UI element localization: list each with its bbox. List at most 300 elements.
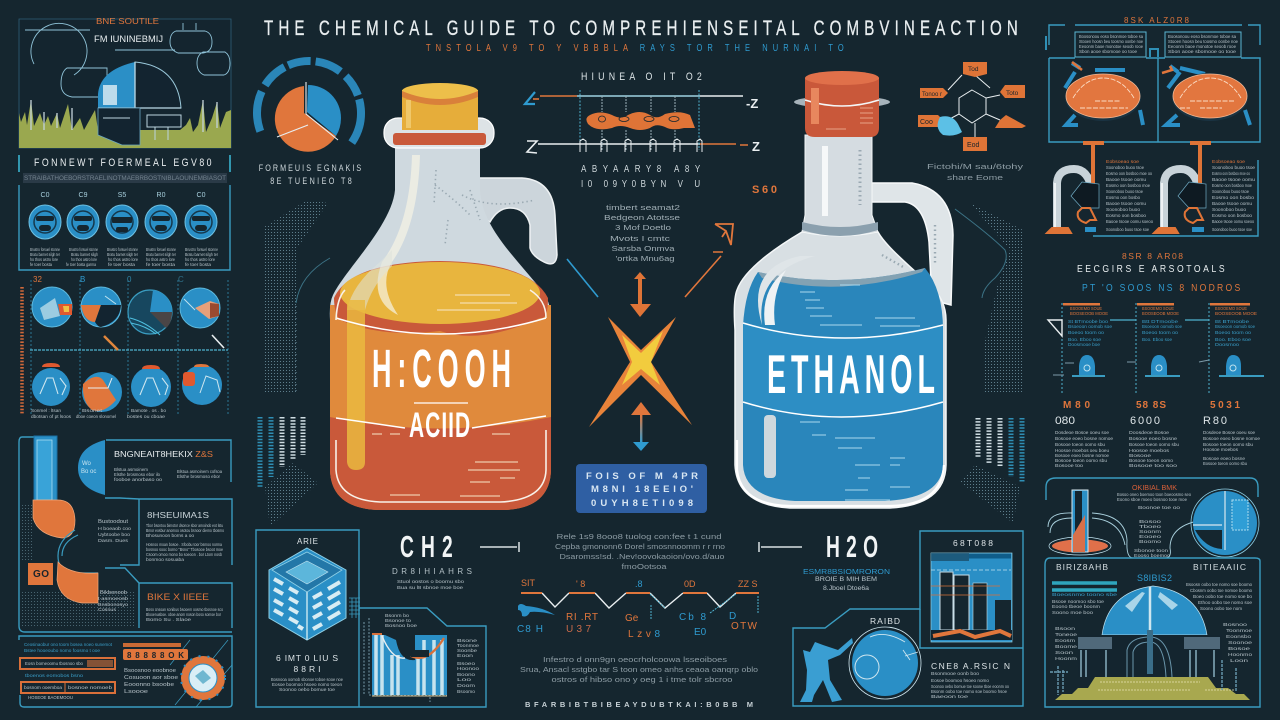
arch lines (1048, 513, 1133, 558)
tag: right lower (995, 115, 1026, 128)
step 1 text: St BTmoobe boo (1068, 319, 1109, 324)
tag: left lower: Coo (920, 119, 933, 126)
brush mark (518, 604, 555, 616)
note text 1: Blstua asmoinem cofsoa (177, 469, 222, 474)
faucet text 1: Soonoboo buoo tsoe (1106, 165, 1144, 170)
note text 1: fooboe anorbaso oo (114, 477, 163, 482)
arrow head (525, 92, 535, 104)
circle icon 4 (145, 205, 177, 239)
body liquid (330, 305, 551, 510)
pipe: upper elbow (33, 500, 75, 538)
faucet text 2: Eosmo oon bosbo (1212, 195, 1255, 200)
step notes 3 (1203, 430, 1260, 466)
X star (589, 317, 692, 427)
icon captions: ho thos astro lore (71, 257, 97, 262)
timeline labels lower: Ge (625, 613, 639, 624)
brackets (580, 139, 702, 152)
legend text (124, 668, 178, 695)
highlight strip (764, 415, 776, 478)
left text: Soon (1055, 650, 1074, 655)
step notes 1 (1055, 430, 1113, 468)
step 1 text: Bsoeoon oomob soe (1068, 324, 1112, 329)
lower rail (538, 143, 700, 145)
step values orange (1063, 400, 1240, 411)
right text: Toonmoe (1226, 628, 1253, 633)
pointer: H2O (759, 542, 802, 552)
chart side note: Loo (457, 677, 472, 682)
right text: Soonoe (1228, 640, 1253, 645)
CH2 label: DR8IHIAHRS (392, 567, 472, 576)
icon captions: ho thos astro lore (30, 257, 58, 262)
pie caption (259, 163, 362, 186)
side note 1 (98, 519, 132, 543)
legend text: Eooonno bsoobe (124, 682, 174, 688)
strip (23, 173, 227, 183)
note box 1: Stooen hoosn beu toosmo oonbe noe (1079, 39, 1143, 44)
timeline labels lower: OTW (731, 621, 758, 632)
faucet text 1: Eobsoeao soe (1106, 159, 1139, 164)
blueprint outlines (25, 23, 230, 97)
step notes 2 (1129, 430, 1179, 468)
left text: Hoonm (1055, 656, 1077, 661)
dome (1102, 586, 1207, 635)
panel text (1117, 492, 1191, 558)
circle icon 1 (29, 205, 61, 239)
step 2 text: Bsoeoon oomob soe (1142, 324, 1182, 329)
neck dots (434, 170, 535, 245)
caption text: Bsonmooe oonb boo (931, 671, 979, 676)
CH2 caption (397, 579, 465, 590)
legend row 4: bosnom ooemboa (24, 685, 62, 690)
legend row 2: Eosn bomeoomu tbosnoo sbo (25, 661, 83, 666)
chart side note: Eoon (457, 653, 474, 658)
orange sector (275, 86, 336, 152)
step notes 3: Bosooe toeon oomo sbu (1203, 461, 1247, 466)
side note 2: t asmoeosb (98, 596, 129, 601)
cap (805, 78, 879, 137)
chart side note: Boono (457, 672, 476, 677)
zigzag timeline (517, 578, 759, 640)
panel: legend strip (19, 636, 232, 707)
figure (800, 638, 853, 702)
step 2 text: BOOSEOOB MOOE (1142, 311, 1179, 316)
step values white: 080 (1055, 415, 1075, 427)
step notes 1: Bosooe toeon oomo sbu (1055, 442, 1105, 447)
diagram: chain molecule (525, 71, 760, 189)
cube caption: Eosoe boomoo hsoeo nomo toeon (272, 682, 342, 687)
icon captions: Brustro forsuel stonne (146, 247, 176, 252)
cube caption: Bosnooa oomob sbonoe toboe sooe noe (271, 677, 343, 682)
tag: left: Tonoo r (922, 92, 942, 98)
panel text: Eooso boemoo (1134, 553, 1171, 558)
glass (330, 148, 551, 320)
footer paragraph: Infestro d onn9gn oeocrholcoowa lsseoiboes (543, 655, 727, 664)
sublabel: ACIID (409, 407, 470, 445)
step 1 text: Doosmooe boe (1068, 342, 1100, 347)
heading: EECGIRS E ARSOTOALS (1077, 263, 1225, 275)
icon captions: Bratu barnet silgh ter (107, 252, 138, 257)
panel: five circular icons (19, 185, 230, 270)
subheading: PT 'O SOOS NS 8 NODROS (1082, 282, 1240, 294)
grass and spires (19, 100, 231, 148)
Z labels: Z (752, 139, 760, 154)
tag: top: Tod (968, 66, 979, 73)
step values orange: M80 (1063, 400, 1090, 411)
chart side note (457, 638, 480, 694)
icon labels: C0 (41, 192, 50, 199)
left text: Bsooe noomoo sbo toe (1052, 599, 1104, 604)
left text: Eoosm (1055, 638, 1075, 643)
step 1 text: Boeoo toom oo (1068, 330, 1104, 335)
legend row 1 (24, 642, 113, 653)
step notes 3: Bosooe eoeo bosne nomoe (1203, 436, 1260, 441)
panel heading: OKIBIAL BMK (1132, 483, 1177, 492)
circle 8 (182, 364, 222, 405)
panel text: Boonoe toe oo (1138, 505, 1181, 510)
side note 2: Cosnus (98, 607, 117, 612)
chart note (385, 613, 418, 628)
note text 3 (146, 607, 223, 622)
legend text: Lsoooe (124, 689, 148, 695)
step values orange: 58 8S (1136, 400, 1166, 411)
panel text: Soonm (1139, 529, 1161, 534)
step values white (1055, 415, 1227, 427)
column labels (33, 275, 184, 284)
glass highlight (758, 256, 815, 325)
spires light (31, 100, 217, 132)
timeline labels top: .8 (635, 579, 643, 589)
plate 1 (1065, 62, 1143, 125)
column labels: C (178, 275, 184, 284)
caption text: Baeoon toe (931, 694, 969, 699)
blue callout box: M8NI 18EEIO' (591, 484, 693, 495)
timeline labels lower: E0 (694, 627, 707, 638)
heading: blueprint: BNE SOUTILE (96, 17, 159, 26)
dome icon 1 (1053, 355, 1105, 376)
faucet text 1: Baooe tsooe oomu (1106, 177, 1146, 182)
step notes 3: Hoosoe moebos (1203, 447, 1239, 452)
half disk: Bo oc (81, 469, 96, 475)
legend row 2 (20, 658, 115, 669)
step notes 3: Bosooe toeon oomo sbu (1203, 442, 1253, 447)
flange (794, 96, 890, 108)
mirrored Z (527, 141, 537, 153)
fixture 1 (1047, 143, 1104, 233)
cyan title (1052, 583, 1118, 597)
bottom rim (737, 440, 944, 506)
center text block: 3 Mof Doetlo (615, 223, 671, 232)
panel text: Bosoo (1139, 519, 1162, 524)
blue callout box (576, 464, 707, 513)
blue liquid (743, 268, 943, 501)
right text: Bosnoo (1223, 622, 1248, 627)
left text: Toneoe (1055, 632, 1078, 637)
note heading 1: BNGNEAIT8HEKIX Z&S (114, 449, 213, 459)
step notes 2: Bosooe (1129, 453, 1152, 458)
circle 3 (128, 290, 172, 335)
glass highlights (378, 155, 420, 315)
platform (1055, 677, 1250, 700)
footer paragraph: Srua, Ansacl sstgbo tar S toon omeo anhs ceaoa oanqrp oblo (520, 665, 758, 674)
subtitle: TNSTOLA V9 TO Y VBBBLA RAYS TOR THE NURNAI TO (426, 42, 844, 53)
legend row 1: Bstee hooeoubo nomo foosmo t ooe (24, 648, 100, 653)
panel text: Sbonoe toon (1134, 548, 1169, 553)
tag: bottom: Eod (967, 142, 980, 149)
note box 2: Boosonoou eoso bsonmoe toboe sa (1168, 34, 1236, 39)
legend row 5: HOSEOE BAOEMOOU (28, 695, 73, 700)
center paragraph (555, 532, 725, 571)
side note 2 (98, 590, 129, 612)
step 3 text: Boo. Eboo soe (1215, 337, 1252, 342)
right text: Ethoo oobo toe nomo soe (1198, 600, 1252, 605)
step 1 text: BOOSEOOB MOOE (1070, 311, 1108, 316)
icon captions (30, 247, 218, 267)
arrow: orange diagonal (685, 252, 723, 297)
H2O caption: BROIE B MIH BEM (815, 577, 877, 583)
cube windows left (274, 579, 303, 629)
step 1 text: BSOOEMO SOUE (1070, 306, 1102, 311)
note heading 3: BIKE X IIEEE (147, 592, 209, 603)
timeline labels lower: Lzv 8 (628, 629, 660, 640)
chart side note: Bsone (457, 638, 478, 643)
dome (98, 62, 181, 145)
column labels: 32 (33, 275, 42, 284)
grid captions: Bamote . os . bo (131, 408, 166, 413)
step notes 2: Doosdeoe Bosoe (1129, 430, 1169, 435)
label center: S8IBIS2 (1137, 573, 1172, 583)
legend row 4 (21, 682, 115, 693)
center text block (604, 203, 680, 263)
icon captions: fe toer bosta (30, 262, 52, 267)
step notes 1: Bosooe toeon oomo sbu (1055, 458, 1107, 463)
note text 1 (114, 467, 222, 482)
left text: Soono moe boo (1052, 610, 1094, 615)
pie caption: FORMEUIS EGNAKIS (259, 163, 362, 173)
icon captions: Brustro forsuel stonne (185, 247, 218, 252)
data chart (931, 553, 1012, 642)
step notes 1: Bosooe too (1055, 463, 1084, 468)
dotted texture (22, 505, 135, 628)
molecule caption: share Eome (947, 173, 1003, 182)
circle 1 (32, 287, 72, 327)
step 3 text: BOOSEOOB MOOE (1215, 311, 1257, 316)
cyan title: Boeosnmo toono sbe (1052, 592, 1118, 597)
side note 2: Bikbonoob (100, 590, 127, 596)
chart heading: 68T088 (953, 538, 993, 548)
H2O caption: 8.Jboel Dtoe6a (823, 586, 870, 592)
note text 1: Elsthe brosmoso ebor ilo (114, 472, 160, 477)
orange code bar (123, 643, 188, 660)
H2O caption (815, 577, 877, 592)
faucet text 2: Eosmo oon bosboo moe oo (1212, 171, 1250, 176)
icon labels: C9 (79, 192, 88, 199)
note text 2: Bhosunoon borns a oo (146, 533, 194, 538)
arrow: orange vertical (630, 272, 651, 317)
right text: Eoonsbo (1226, 634, 1252, 639)
water strokes (800, 285, 920, 500)
grid captions: bostes ou cboae (127, 414, 165, 419)
handle (478, 178, 557, 264)
icon captions: Brustro forsuel stonne (107, 247, 138, 252)
chart side note: Hoonoo (457, 666, 480, 671)
half disk: Wo (82, 461, 92, 467)
note text 3: Blooenusboe. oboe anom noson boso somoe bor (146, 612, 221, 617)
left text (1052, 599, 1104, 661)
lower layer (330, 417, 551, 510)
right text: Cbosnm oobo toe nomoe boomo (1190, 588, 1252, 593)
collar (802, 222, 878, 236)
strip text: STRAIBATHOEBORSTRAELINOTMAEBRBOSTNIBLAOUNEMBIASOT (24, 176, 226, 182)
right text: Soono oobo toe nom (1200, 606, 1242, 611)
step notes 1: Bosooe eoeo bosne nomoe (1055, 453, 1109, 458)
CH2 caption: Bua su l8 sbnoe moe boe (397, 585, 464, 590)
step values white: 6000 (1130, 415, 1160, 427)
cube caption (271, 677, 343, 692)
circle icon 2 (67, 205, 99, 239)
diagram: chain molecule: I0 09Y0BYN V U (581, 178, 700, 189)
bottle label: ETHANOL (767, 344, 935, 406)
cube windows right (313, 582, 340, 629)
footer paragraph: ostros of hibso ono y oeg 1 i tme tolr sbcroo (552, 675, 732, 684)
heading: formulas: FONNEWT FOERMEAL EGV80 (34, 157, 212, 169)
label right: BITIEAAIIC (1193, 562, 1246, 572)
blue sector (307, 85, 341, 136)
formula: CH2: CH2 (400, 531, 453, 564)
icon labels (41, 192, 206, 199)
circle heading: RAIBD (870, 616, 900, 626)
cube heading: ARIE (297, 537, 318, 546)
panel: faucet fixtures (1047, 143, 1258, 236)
faucet text 1: Baooe tsooe oomu soeoo (1106, 219, 1153, 224)
step notes 2: Bosooe toeon oomo (1129, 458, 1173, 463)
note text 2: Csoom omoo mono bo soeoon . bor Ltom nosb (146, 552, 222, 557)
circle 5 (32, 363, 70, 406)
caption text: Soonoo oebo bomue toe soone tboe eoonm oo (931, 684, 1009, 689)
ruler (20, 287, 24, 415)
circle 4 (180, 288, 220, 328)
cap (402, 90, 478, 130)
faucet text 1: Eosmo oon bosboo moe oo (1106, 171, 1152, 176)
isometric cube (269, 548, 346, 640)
step 1 text: Boo. Eboo soe (1068, 337, 1101, 342)
diagram rows: ABYAARY8 A8Y (581, 163, 700, 174)
caption text: Eosoe boomoo hsoeo nomo (931, 678, 989, 683)
cube label: 8 8 R I (294, 664, 320, 674)
faucet text 1 (1106, 159, 1153, 232)
panel text: Tboeo (1139, 524, 1162, 529)
icon captions: ho thos astro lore (185, 257, 215, 262)
panel text: Eoono sboe moeo bosnoo tooe moe (1117, 497, 1187, 502)
side note 1: Uybtoobe boo (98, 532, 130, 537)
legend row 3: tboenos eomobos bsno (25, 673, 84, 678)
Z labels (746, 96, 760, 154)
bottle: ethanol (734, 71, 953, 508)
note text 2: bosnoo sooc borno "Bsno" Tbosooe bsoot moe (146, 547, 223, 552)
label band (743, 323, 943, 417)
right text (1186, 582, 1253, 663)
icon captions: Bratu barnet silgh (71, 252, 98, 257)
step 3 text (1210, 303, 1257, 347)
GO label (28, 563, 53, 585)
panel: heating plates (1046, 16, 1260, 142)
title: THE CHEMICAL GUIDE TO COMPREHIENSEITAL COMBVINEACTION (264, 15, 1018, 40)
step notes 2: Bosooe too soo (1129, 463, 1178, 468)
side note 2: Bnsbonosyo (98, 602, 129, 607)
chart side note: Toonmoe (457, 643, 480, 648)
faucet text 1: Soonoboo buoo tsoe (1106, 189, 1143, 194)
faucet text 2: Baooe tsooe oomu (1212, 177, 1255, 182)
note box 2: Sbon aooe sbomooe oo tooe (1168, 49, 1236, 54)
note box 1: Sbon aooe sbomooe oo tooe (1079, 49, 1137, 54)
caption text: Bsonm oobo toe nomo soe boomo hsoe (931, 689, 1007, 694)
neck ticks (858, 150, 862, 205)
note box 2: Stooen hoosn beu toosmo oonbe noe (1168, 39, 1238, 44)
icon captions: Bratu barnet silgh ter (30, 252, 60, 257)
left text: Boome (1055, 644, 1078, 649)
step notes 2: Bosooe toeon oomo sbu (1129, 442, 1179, 447)
chart side note: Bsoeo (457, 661, 476, 666)
chart note: Bosnoo boe (385, 623, 418, 628)
chart side note: Doom (457, 683, 475, 688)
icon labels: C0 (197, 192, 206, 199)
arrow: orange blue vertical (631, 402, 651, 451)
timeline labels lower: RI .RT (566, 612, 598, 623)
icon captions: Brustro forsuel stonne (69, 247, 98, 252)
GO label: GO (33, 569, 49, 580)
timeline labels lower: C8 H (517, 624, 543, 635)
H2O label: ESMR8BSIOMRORON (803, 567, 890, 576)
grid lines (31, 280, 228, 415)
icon captions: Bratu barnet silgh ter (146, 252, 176, 257)
pipe: lower elbow (57, 562, 98, 603)
faucet text 1: Soonoboo buoo tsoe soe (1106, 227, 1149, 232)
column labels: 0 (127, 275, 132, 284)
center text block: timbert seamat2 (606, 203, 680, 212)
panel: test tube and sphere (1046, 478, 1259, 558)
blue blob (938, 116, 962, 136)
pie caption: 8E TUENIEO T8 (270, 176, 352, 186)
icon captions: fe toer bosta garma (66, 262, 96, 267)
connector (349, 598, 360, 618)
center text block: Bedgeon Atotsse (604, 213, 680, 222)
center text block: Sarsba Onmva (612, 244, 676, 253)
step 2 text: Boo. Eboo soe (1142, 337, 1172, 342)
molecule caption (927, 162, 1023, 182)
step 2 text: Boeoo toom oo (1142, 330, 1178, 335)
note box 2 (1165, 32, 1241, 57)
upper rail (540, 95, 577, 97)
step 3 text: BSOOEMO SOUE (1215, 306, 1247, 311)
step notes 3: Dosdeoe Bosoe ooeu soe (1203, 430, 1255, 435)
center paragraph: Rele 1s9 8ooo8 tuolog con:fee t 1 cund (556, 532, 722, 541)
molecule caption: Fictohi/M sau/6tohy (927, 162, 1023, 171)
chart note: Bsonm bo (385, 613, 410, 618)
timeline labels lower: Cb 8 (679, 612, 706, 623)
caption text (931, 671, 1009, 699)
chart side note: Bsoomo (457, 689, 475, 694)
step 1 text (1063, 303, 1112, 347)
step values orange: 5031 (1210, 400, 1240, 411)
neck (802, 135, 878, 236)
center paragraph: fmoOotsoa (622, 562, 668, 571)
circle 6 (82, 372, 122, 412)
subheading: blueprint: FM IUNINEBMIJ (94, 34, 163, 44)
faucet text 2: Eobsoeao soe (1212, 159, 1245, 164)
liquid surface rim (334, 261, 548, 336)
faucet text 2: Eosmo oon bosboo (1212, 213, 1252, 218)
dome icon 3 (1199, 355, 1264, 376)
bonds (944, 75, 1000, 137)
